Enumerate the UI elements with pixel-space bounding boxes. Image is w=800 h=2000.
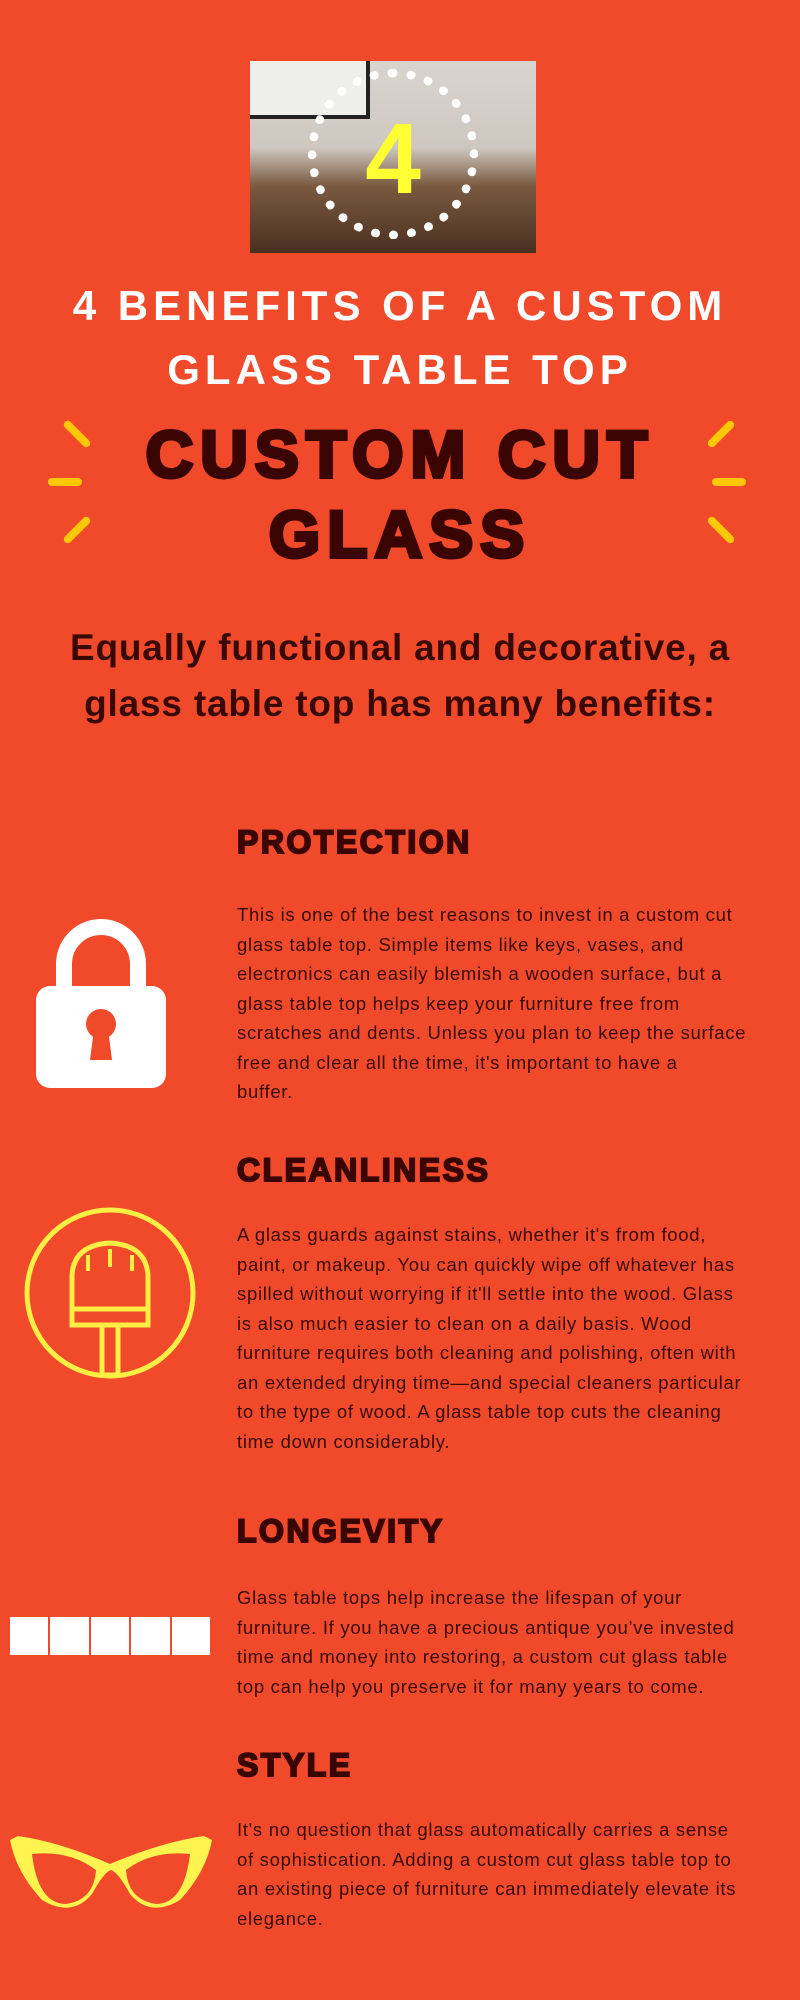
- heading: cleanliness: CLEANLINESS: [237, 1152, 490, 1188]
- heading: style: STYLE: [237, 1747, 353, 1783]
- icon: cat-eye glasses: [10, 1836, 212, 1908]
- text: protection: buffer.: [237, 1081, 293, 1102]
- subtitle: glass table top has many benefits:: [84, 683, 716, 724]
- main heading: GLASS: [269, 497, 531, 571]
- text: protection: free and clear all the time, it's important to have a: [237, 1052, 678, 1072]
- rays right: [708, 420, 746, 544]
- number 4: 4: [365, 103, 421, 215]
- text: longevity: furniture. If you have a precious antique you’ve invested: [237, 1616, 735, 1638]
- icon: white squares: [10, 1617, 210, 1655]
- text: cleanliness: is also much easier to clean on a daily basis. Wood: [237, 1312, 692, 1334]
- text: style: an existing piece of furniture can immediately elevate its: [237, 1878, 736, 1899]
- text: protection: electronics can easily blemish a wooden surface, but a: [237, 963, 722, 984]
- heading: longevity: LONGEVITY: [237, 1513, 444, 1549]
- text: cleanliness: paint, or makeup. You can quickly wipe off whatever has: [237, 1254, 735, 1274]
- text: cleanliness: time down considerably.: [237, 1430, 450, 1452]
- subtitle: Equally functional and decorative, a: [70, 627, 730, 668]
- text: protection: scratches and dents. Unless you plan to keep the surface: [237, 1022, 746, 1043]
- subtitle: [70, 627, 730, 724]
- text: cleanliness: furniture requires both cleaning and polishing, often with: [237, 1342, 736, 1363]
- title: GLASS TABLE TOP: [167, 346, 633, 393]
- text: cleanliness: spilled without worrying if it'll settle into the wood. Glass: [237, 1283, 734, 1304]
- title: [73, 282, 727, 393]
- text: protection: glass table top. Simple items like keys, vases, and: [237, 934, 684, 954]
- text: longevity: [237, 1587, 735, 1697]
- text: longevity: top can help you preserve it for many years to come.: [237, 1676, 704, 1696]
- text: cleanliness: to the type of wood. A glass table top cuts the cleaning: [237, 1401, 722, 1422]
- photo with number 4: [250, 61, 536, 253]
- photo: window panes: [250, 61, 370, 119]
- text: protection: glass table top helps keep your furniture free from: [237, 992, 680, 1014]
- text: cleanliness: A glass guards against stains, whether it's from food,: [237, 1224, 706, 1245]
- icon: brush in circle: [24, 1208, 196, 1378]
- icon: lock: [36, 919, 166, 1088]
- wreath of white drops: [308, 69, 478, 239]
- text: style: It's no question that glass automatically carries a sense: [237, 1819, 729, 1840]
- title: 4 BENEFITS OF A CUSTOM: [73, 282, 727, 329]
- main heading: CUSTOM CUT: [146, 417, 654, 491]
- text: cleanliness: an extended drying time—and special cleaners particular: [237, 1372, 741, 1392]
- text: protection: This is one of the best reasons to invest in a custom cut: [237, 904, 732, 925]
- text: style: of sophistication. Adding a custom cut glass table top to: [237, 1848, 731, 1870]
- text: protection: [237, 904, 746, 1102]
- rays left: [48, 420, 90, 544]
- main heading: [146, 417, 654, 571]
- text: style: elegance.: [237, 1908, 324, 1928]
- text: longevity: Glass table tops help increase the lifespan of your: [237, 1587, 682, 1608]
- text: longevity: time and money into restoring, a custom cut glass table: [237, 1646, 728, 1667]
- heading: protection: PROTECTION: [237, 824, 472, 860]
- text: cleanliness: [237, 1224, 741, 1452]
- text: style: [237, 1819, 736, 1929]
